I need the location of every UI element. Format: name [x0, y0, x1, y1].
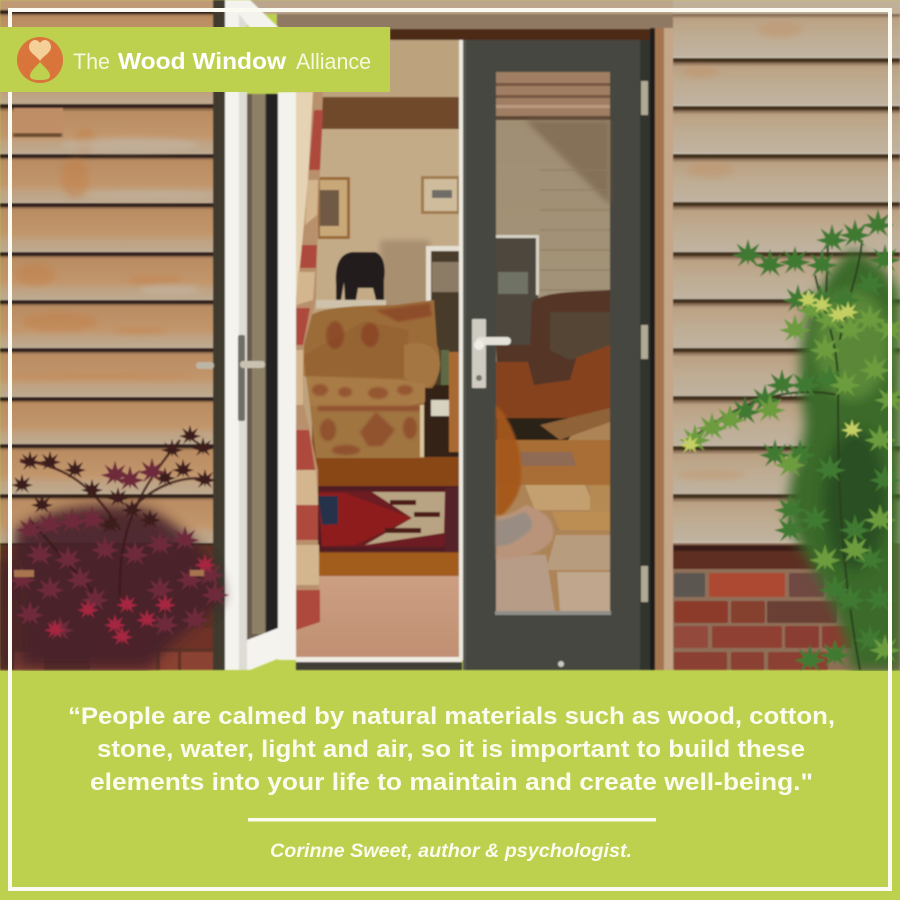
bookshelf	[426, 246, 460, 416]
right timber cladding	[672, 0, 900, 670]
brand banner: Wood Window	[118, 48, 286, 74]
quote text: stone, water, light and air, so it is important to build these	[97, 736, 805, 763]
brand banner	[0, 27, 390, 92]
doormat carpet	[296, 576, 460, 658]
quote text: “People are calmed by natural materials such as wood, cotton,	[68, 703, 835, 730]
red japanese maple plant	[0, 425, 229, 668]
green maple plant	[679, 209, 900, 672]
quote panel	[0, 671, 900, 900]
reflected timber soffit	[496, 72, 610, 205]
door glass reflection	[496, 72, 610, 613]
wordmark: The	[73, 49, 110, 74]
open white french door	[196, 0, 296, 670]
left timber cladding	[0, 0, 215, 670]
door glass pane	[247, 94, 269, 654]
elephant ornament	[336, 252, 385, 300]
sofa	[303, 300, 440, 458]
threshold	[296, 657, 462, 662]
reflected orange tree	[496, 405, 521, 520]
interior wall	[316, 129, 460, 309]
persian rug	[314, 486, 459, 552]
reflected bookcase	[496, 235, 539, 346]
reflected path stones	[496, 505, 553, 560]
left brick courses	[0, 545, 213, 670]
wood floor	[312, 416, 460, 576]
right brick plinth	[673, 543, 900, 670]
framed picture left	[318, 177, 350, 239]
photo: house exterior with open wood doors	[0, 0, 900, 672]
divider	[248, 818, 656, 822]
quote text: elements into your life to maintain and create well-being."	[90, 769, 813, 796]
interior room	[296, 40, 462, 670]
framed picture right	[421, 176, 459, 214]
lintel and door casing	[215, 0, 673, 670]
logo: wood heart and tree roundel	[17, 37, 63, 83]
checked curtain	[296, 92, 323, 630]
reflected garden floor	[496, 420, 610, 612]
door handle and lock plate	[472, 319, 511, 388]
attribution: Corinne Sweet, author & psychologist.	[270, 841, 632, 862]
left door handle	[196, 335, 265, 421]
quote text	[68, 703, 835, 796]
grey wood door	[459, 40, 650, 670]
brand banner: Alliance	[296, 49, 371, 74]
door hinges	[641, 81, 648, 602]
reflected leather armchair	[496, 290, 610, 440]
ceiling beam	[322, 97, 460, 129]
side table	[431, 352, 460, 452]
